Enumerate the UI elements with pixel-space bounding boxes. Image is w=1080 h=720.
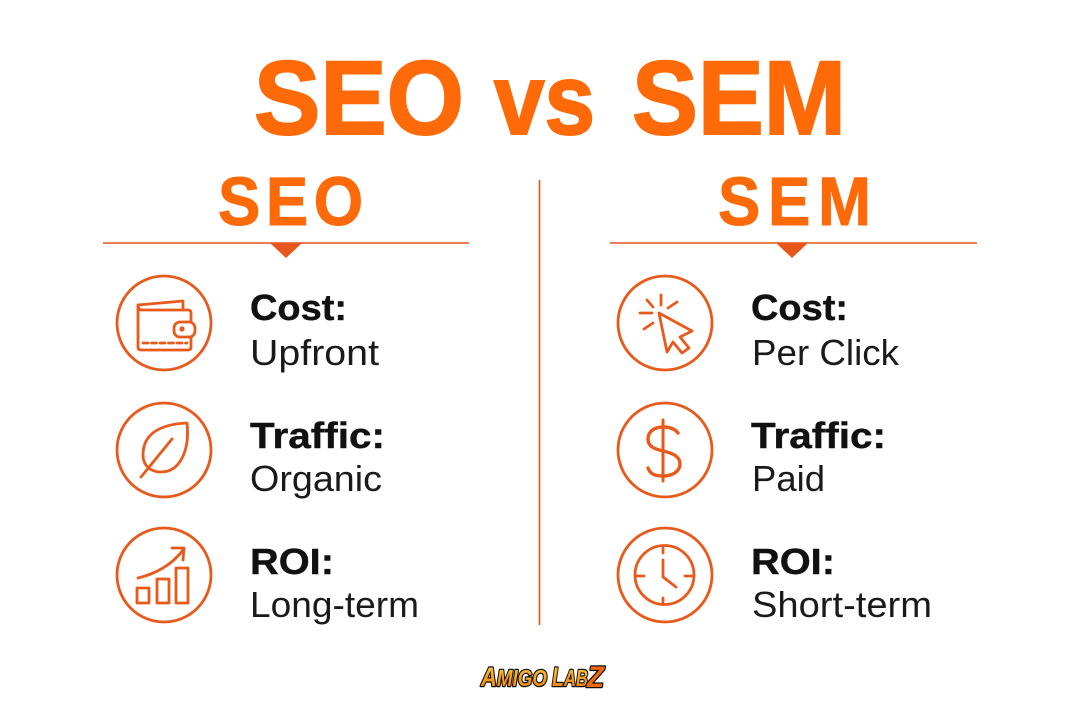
- icon: wallet: [117, 276, 211, 370]
- icon: growth chart: [117, 528, 211, 622]
- text: SEM cost: [751, 287, 900, 373]
- text: SEM traffic: Traffic:: [751, 415, 886, 456]
- text: SEM ROI: ROI:: [751, 541, 835, 582]
- text: SEM traffic: [751, 415, 886, 499]
- icon: leaf: [117, 403, 211, 497]
- text: SEO cost: Cost:: [250, 287, 347, 328]
- logo: Amigo Labz: Z: [586, 661, 606, 694]
- text: SEM cost: Per Click: [752, 332, 900, 373]
- heading: SEO: SEO: [218, 164, 369, 241]
- text: SEO traffic: Organic: [250, 458, 382, 499]
- heading: SEM: [610, 164, 977, 258]
- text: SEO traffic: [250, 415, 385, 499]
- text: SEO ROI: ROI:: [250, 541, 334, 582]
- heading: SEM: SEM: [718, 164, 879, 241]
- icon: dollar: [618, 403, 712, 497]
- text: SEM cost: Cost:: [751, 287, 848, 328]
- title: [254, 40, 846, 157]
- text: SEM ROI: [751, 541, 932, 625]
- text: SEO cost: Upfront: [250, 332, 379, 373]
- text: SEO ROI: [250, 541, 419, 625]
- logo: Amigo Labz: LAB: [552, 662, 588, 692]
- text: SEM traffic: Paid: [752, 458, 825, 499]
- logo: Amigo Labz: AMIGO: [480, 662, 547, 692]
- title: SEM: [632, 40, 846, 157]
- title: vs: [494, 44, 595, 156]
- text: SEO traffic: Traffic:: [250, 415, 385, 456]
- icon: cursor click: [618, 276, 712, 370]
- title: SEO: [254, 40, 464, 157]
- text: SEM ROI: Short-term: [752, 584, 932, 625]
- icon: clock: [618, 528, 712, 622]
- heading: SEO: [103, 164, 469, 258]
- text: SEO cost: [250, 287, 379, 373]
- text: SEO ROI: Long-term: [250, 584, 419, 625]
- center divider: [538, 180, 540, 625]
- logo: Amigo Labz: [480, 661, 606, 694]
